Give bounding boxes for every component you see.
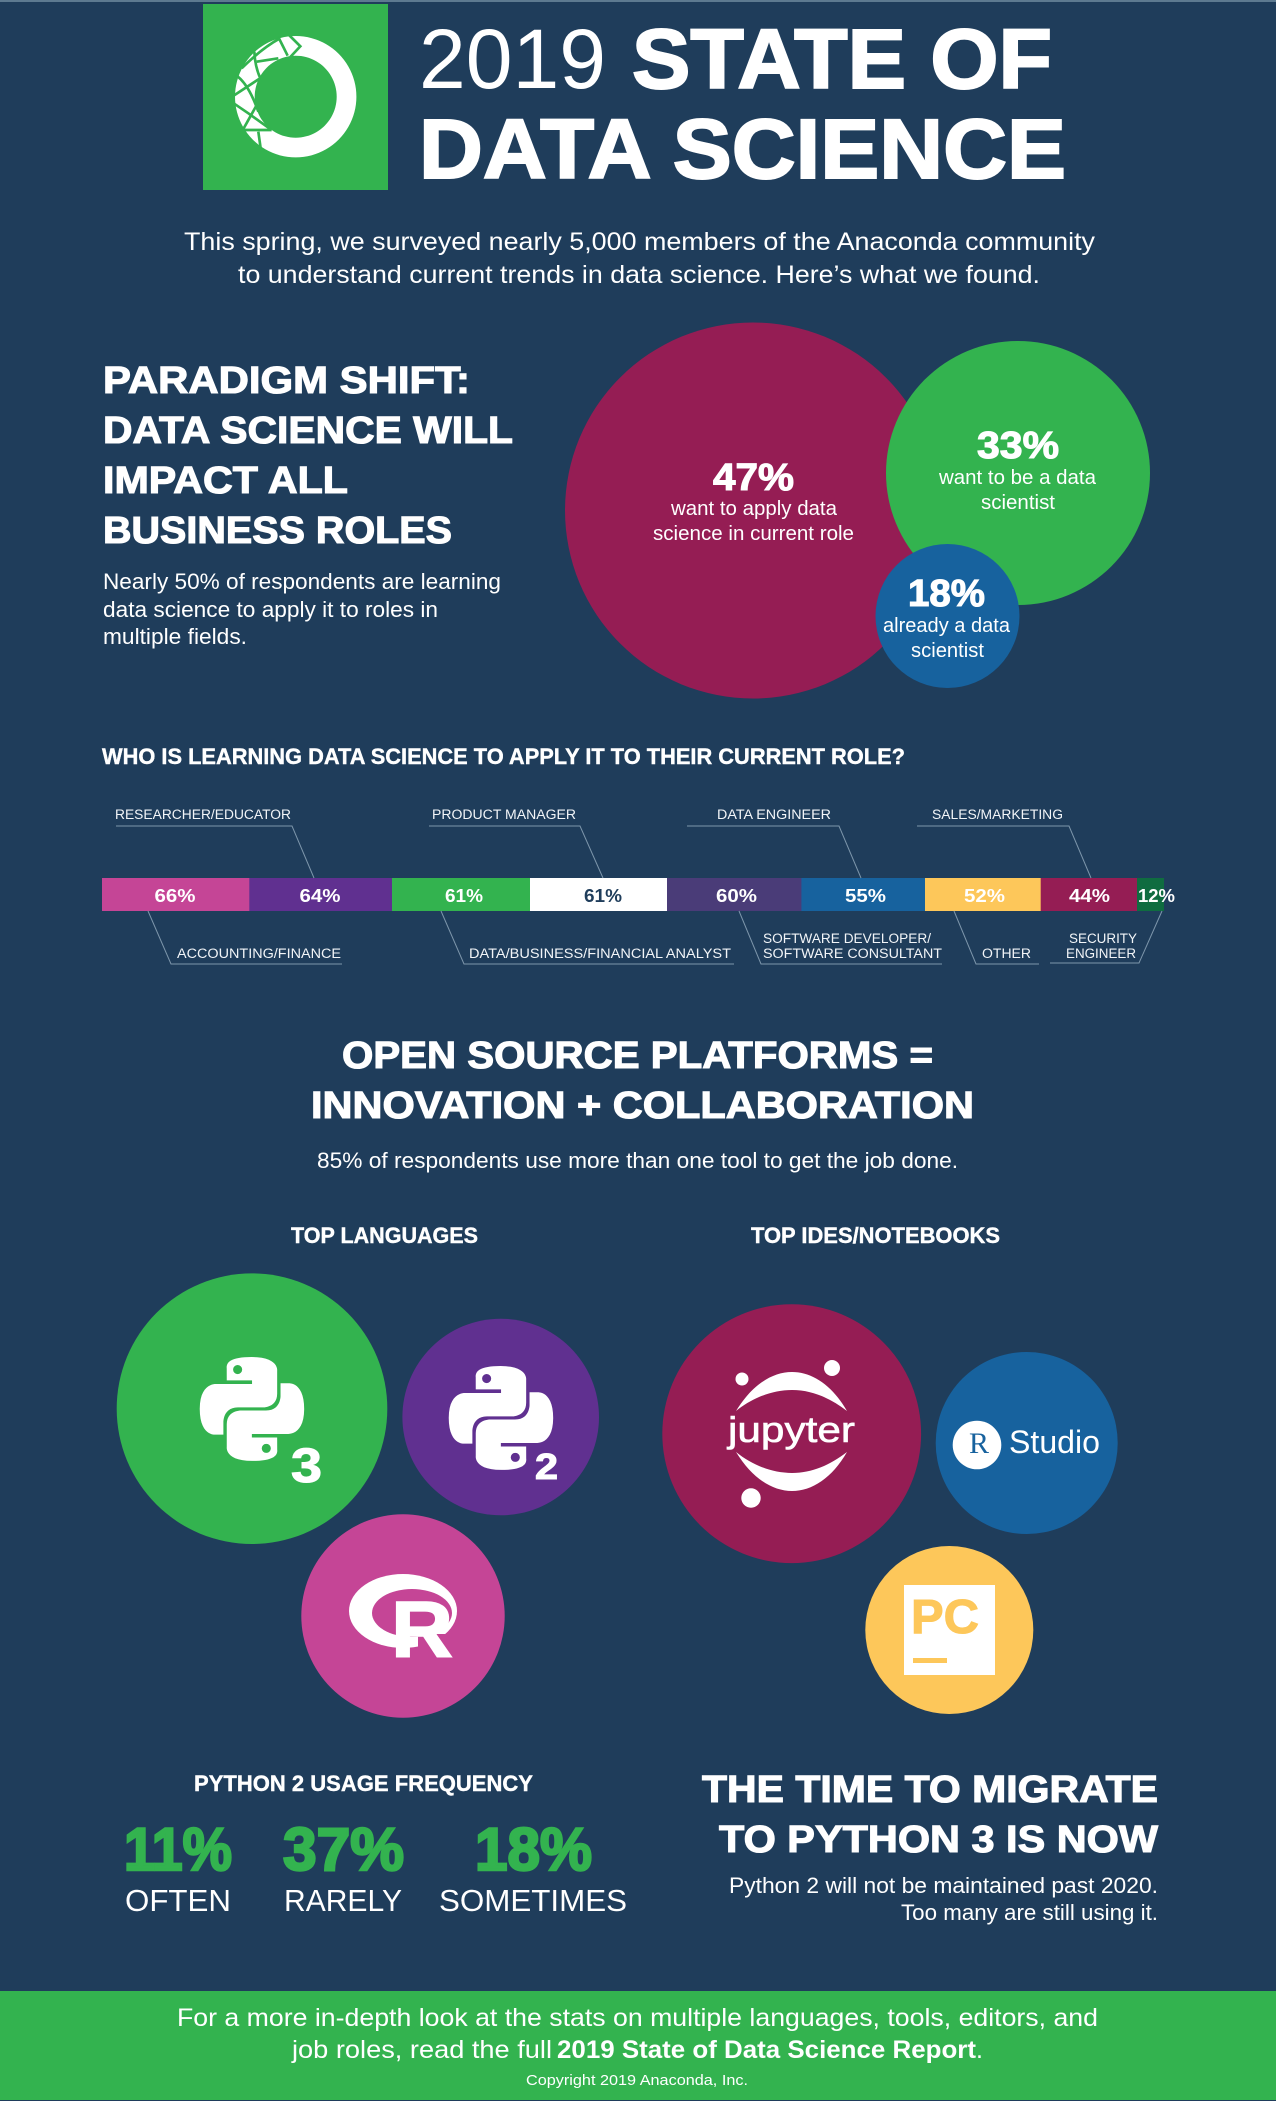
icon: Jupyter circle [662,1304,921,1563]
stat: rarely: 37% [283,1816,404,1883]
role labels: SOFTWARE CONSULTANT [763,946,942,961]
heading: open source platforms: INNOVATION + COLLABORATION [311,1085,974,1127]
icon: Python 2 circle [402,1319,599,1515]
heading: usage frequency: PYTHON 2 USAGE FREQUENCY [194,1771,533,1796]
role labels: ENGINEER [1066,946,1136,961]
circle: 47%: want to apply data [670,498,838,520]
text block: migrate body [729,1873,1158,1925]
percentages: 61% [584,886,622,906]
heading: top IDEs: TOP IDES/NOTEBOOKS [751,1223,1000,1248]
text block: migrate body: Python 2 will not be maintained past 2020. [729,1873,1158,1898]
role labels: PRODUCT MANAGER [432,807,576,822]
icon: PyCharm circle [865,1546,1033,1714]
panel: Python 2 usage frequency [124,1771,627,1918]
role labels: SECURITY [1069,931,1137,946]
circle: 33%: want to be a data [938,467,1097,489]
footer text [177,2004,1098,2064]
heading: top languages: TOP LANGUAGES [291,1223,478,1248]
icon: PyCharm circle: PC [911,1591,979,1644]
heading: who is learning: WHO IS LEARNING DATA SCIENCE TO APPLY IT TO THEIR CURRENT ROLE? [102,744,905,769]
stat: sometimes: SOMETIMES [439,1883,627,1918]
role labels: SALES/MARKETING [932,807,1063,822]
footer text: . [976,2036,983,2064]
role labels: SOFTWARE DEVELOPER/ [763,931,931,946]
title: 2019 [419,12,606,106]
footer text: For a more in-depth look at the stats on multiple languages, tools, editors, and [177,2004,1098,2032]
percentages: 44% [1069,886,1110,906]
heading: time to migrate: TO PYTHON 3 IS NOW [719,1819,1158,1861]
icon: Anaconda logo [203,4,388,190]
text block: paradigm shift body: multiple fields. [103,624,247,649]
stat: often: 11% [124,1816,232,1883]
footer band [0,1991,1276,2100]
leader lines [116,826,1162,964]
intro text: to understand current trends in data science. Here’s what we found. [238,261,1040,289]
circle: 18%: already a data [883,615,1011,637]
icon: Jupyter circle: jupyter [727,1409,855,1450]
text block: paradigm shift body: data science to apply it to roles in [103,597,438,622]
stat: often: OFTEN [125,1883,231,1918]
percentages [154,886,1175,906]
icon: R language circle: R [391,1585,453,1674]
icon: R language circle [301,1514,505,1718]
heading: time to migrate: THE TIME TO MIGRATE [702,1769,1158,1811]
role labels [115,807,1137,961]
heading: time to migrate [702,1769,1158,1861]
circle: 18%: 18% [908,573,985,615]
circle: 33% [886,341,1150,605]
circle: 18%: scientist [911,640,984,662]
text block: paradigm shift body [103,569,501,649]
icon: RStudio circle [936,1352,1118,1534]
role labels: DATA ENGINEER [717,807,831,822]
heading: paradigm shift: BUSINESS ROLES [103,510,452,552]
percentages: 64% [300,886,340,906]
circle: 47%: science in current role [653,523,854,545]
icon: Python 2 circle: 2 [535,1446,558,1487]
percentages: 52% [964,886,1005,906]
role labels: DATA/BUSINESS/FINANCIAL ANALYST [469,946,731,961]
circle: 18% [876,544,1020,688]
stat: rarely [283,1816,404,1918]
footer text: 2019 State of Data Science Report [557,2036,977,2064]
percentages: 60% [716,886,757,906]
stat: sometimes [439,1816,627,1918]
chart: role percentage bar [102,807,1175,964]
intro text [184,228,1096,289]
role labels: OTHER [982,946,1031,961]
intro text: This spring, we surveyed nearly 5,000 members of the Anaconda community [184,228,1096,256]
circle: 33%: scientist [981,492,1055,514]
footer text: job roles, read the full [291,2036,552,2064]
role labels: ACCOUNTING/FINANCE [177,946,341,961]
circle: 33%: 33% [977,425,1059,467]
role labels: RESEARCHER/EDUCATOR [115,807,291,822]
icon: RStudio circle: R [969,1427,989,1460]
bar segments [102,878,1164,911]
percentages: 66% [154,886,196,906]
circle: 47%: 47% [713,457,794,499]
heading: open source platforms: OPEN SOURCE PLATFORMS = [342,1035,933,1077]
icon: RStudio circle: Studio [1009,1424,1100,1460]
heading: paradigm shift: IMPACT ALL [103,460,348,502]
heading: paradigm shift: PARADIGM SHIFT: [103,360,470,402]
chart: overlapping circles of aspirations [565,322,1150,698]
heading: paradigm shift [103,360,513,552]
heading: open source platforms [311,1035,974,1127]
title: STATE OF [632,12,1052,106]
stat: rarely: RARELY [284,1883,402,1918]
text block: migrate body: Too many are still using it. [901,1900,1158,1925]
heading: paradigm shift: DATA SCIENCE WILL [103,410,513,452]
stat: often [124,1816,232,1918]
percentages: 12% [1138,886,1175,906]
stat: sometimes: 18% [475,1816,592,1883]
title [419,12,1066,196]
circle: 47% [565,322,941,698]
text block: open source subhead: 85% of respondents use more than one tool to get the job done. [317,1148,958,1173]
text block: paradigm shift body: Nearly 50% of respondents are learning [103,569,501,594]
icon: Python 3 circle [117,1273,387,1544]
title: DATA SCIENCE [419,102,1066,196]
copyright: Copyright 2019 Anaconda, Inc. [526,2072,748,2089]
percentages: 61% [445,886,483,906]
percentages: 55% [845,886,886,906]
icon: Python 3 circle: 3 [291,1440,322,1493]
